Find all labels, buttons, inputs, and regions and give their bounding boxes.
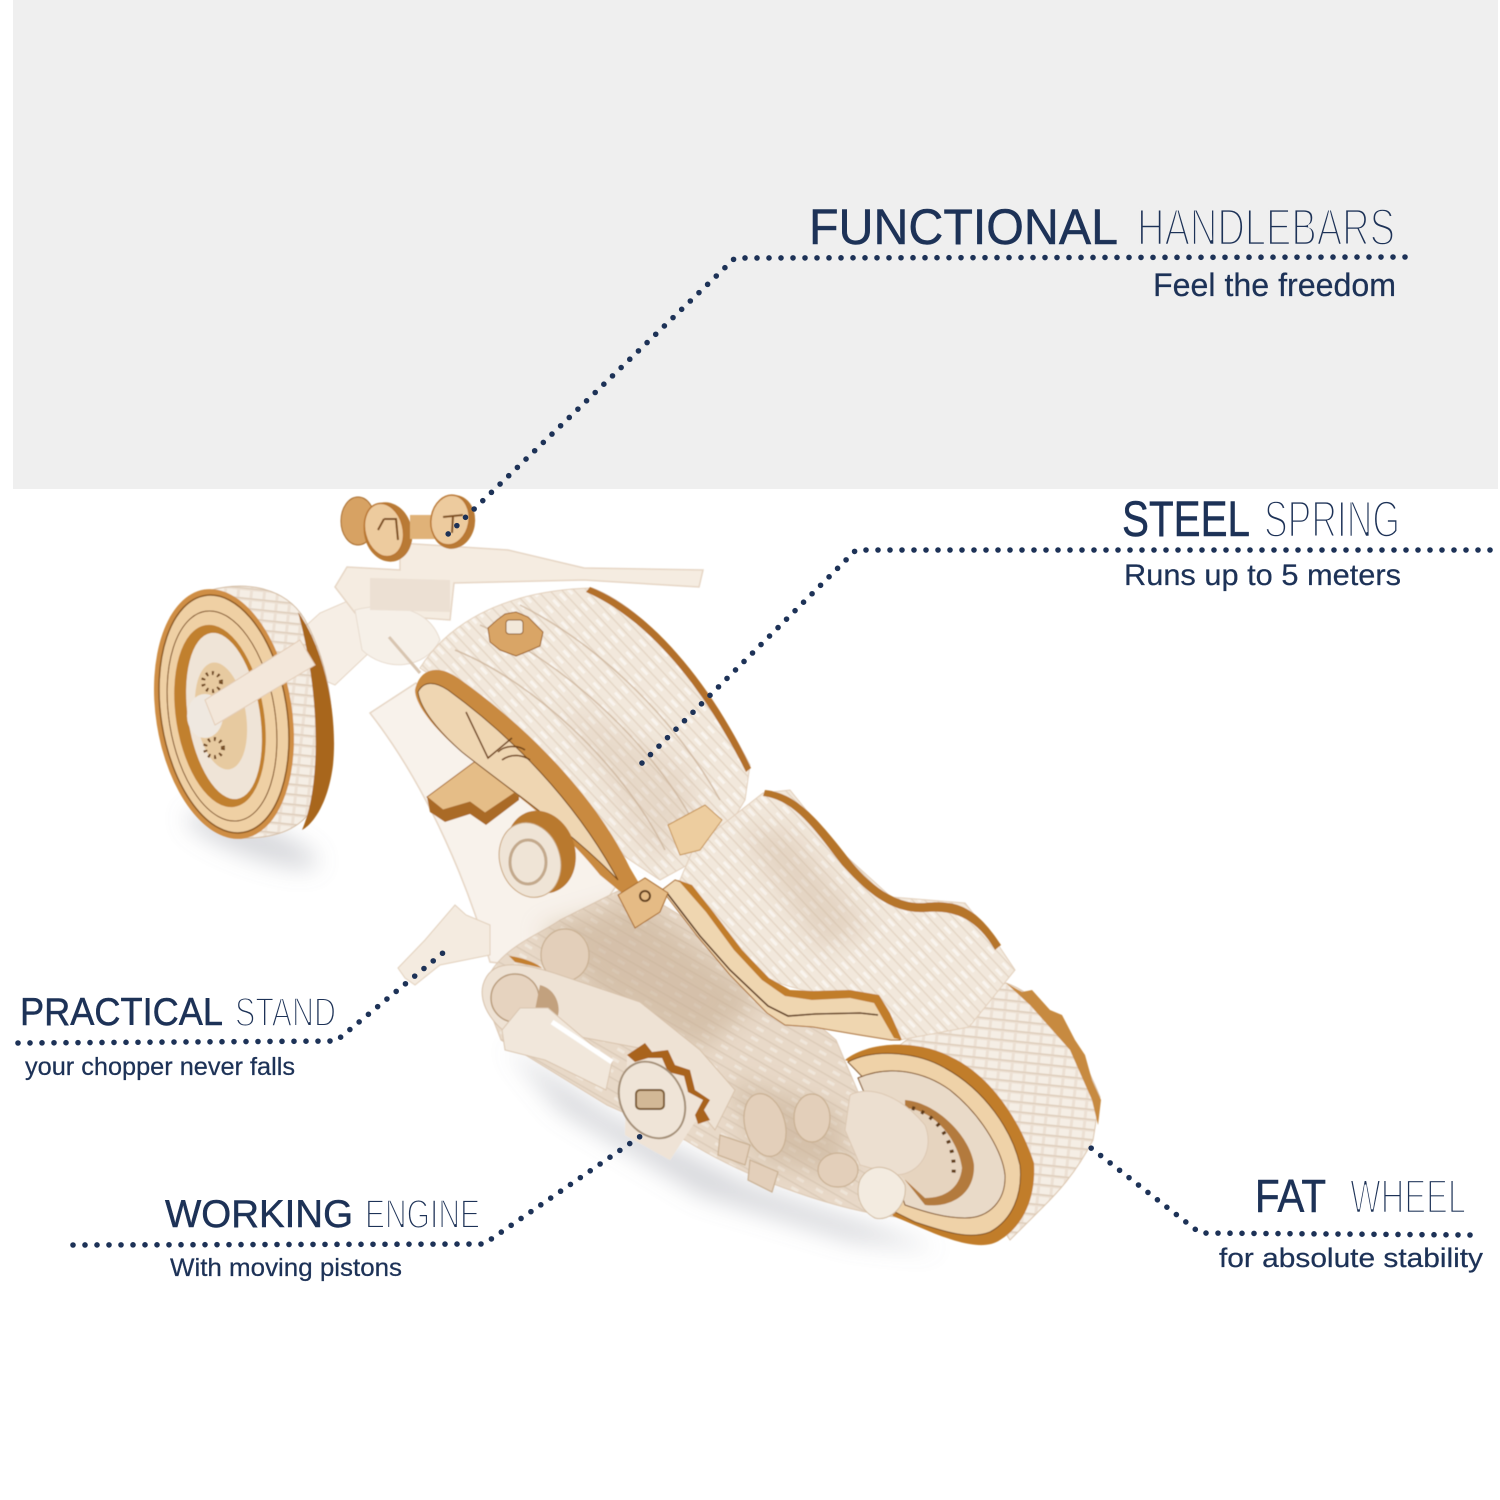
heading	[809, 199, 1395, 257]
engine detail shapes	[541, 929, 858, 1192]
wood bracket	[427, 760, 519, 813]
handlebars and fork	[224, 543, 703, 713]
rear wheel tread	[900, 983, 1100, 1240]
callout: working engine	[73, 1131, 648, 1282]
windshield plate	[370, 683, 620, 970]
ground shadows	[181, 801, 940, 1250]
subtitle: Feel the freedom	[1153, 267, 1396, 303]
seat wooden back edge	[763, 790, 1001, 950]
leader line	[444, 257, 1405, 538]
heading	[1255, 1170, 1466, 1224]
tank cap	[488, 612, 543, 656]
tank shading	[560, 700, 700, 860]
seat shading	[740, 830, 870, 950]
grey background panel	[13, 0, 1498, 489]
chopper motorcycle model	[137, 492, 1101, 1250]
callout: fat wheel	[1091, 1148, 1484, 1273]
heading	[20, 989, 336, 1035]
gear	[606, 1043, 710, 1160]
subtitle: your chopper never falls	[25, 1053, 295, 1081]
tank stripes	[455, 605, 720, 850]
leader line	[73, 1131, 648, 1245]
gauges	[341, 492, 479, 567]
callout: practical stand	[18, 952, 444, 1081]
axle	[858, 1167, 905, 1219]
heading: HANDLEBARS	[1137, 199, 1395, 257]
engine body	[483, 885, 905, 1218]
rear hub clear	[845, 1091, 928, 1175]
heading: SPRING	[1264, 491, 1400, 549]
front wheel	[137, 579, 334, 849]
headlight disc	[490, 802, 586, 905]
center clip	[668, 805, 722, 855]
subtitle: for absolute stability	[1219, 1243, 1484, 1273]
piston rod	[502, 1008, 612, 1090]
pivot bracket	[618, 878, 668, 928]
leader line	[1091, 1148, 1470, 1235]
heading: STEEL	[1122, 491, 1250, 547]
heading	[165, 1191, 480, 1237]
heading: PRACTICAL	[20, 991, 223, 1034]
kickstand	[398, 905, 490, 985]
leader line	[18, 952, 444, 1043]
subtitle: With moving pistons	[170, 1254, 402, 1282]
heading	[1122, 491, 1400, 549]
tank wooden side panel	[415, 670, 640, 893]
heading: STAND	[235, 989, 336, 1035]
callout: steel spring	[637, 491, 1490, 768]
heading: ENGINE	[365, 1191, 480, 1237]
tank rear edge	[586, 587, 751, 772]
callout: functional handlebars	[444, 199, 1405, 538]
heading: FUNCTIONAL	[809, 199, 1118, 255]
rear pulley	[491, 974, 539, 1022]
heading: FAT	[1255, 1170, 1326, 1222]
engine shading	[540, 900, 850, 1180]
engraved logo	[466, 712, 530, 760]
rear wheel wood	[845, 1045, 1034, 1245]
heading: WORKING	[165, 1193, 353, 1236]
subtitle: Runs up to 5 meters	[1124, 559, 1401, 592]
seat	[680, 790, 1015, 1040]
tank body	[420, 588, 750, 880]
belt cover	[482, 965, 735, 1130]
leader line	[637, 550, 1490, 768]
seat wooden side rail	[662, 880, 900, 1040]
